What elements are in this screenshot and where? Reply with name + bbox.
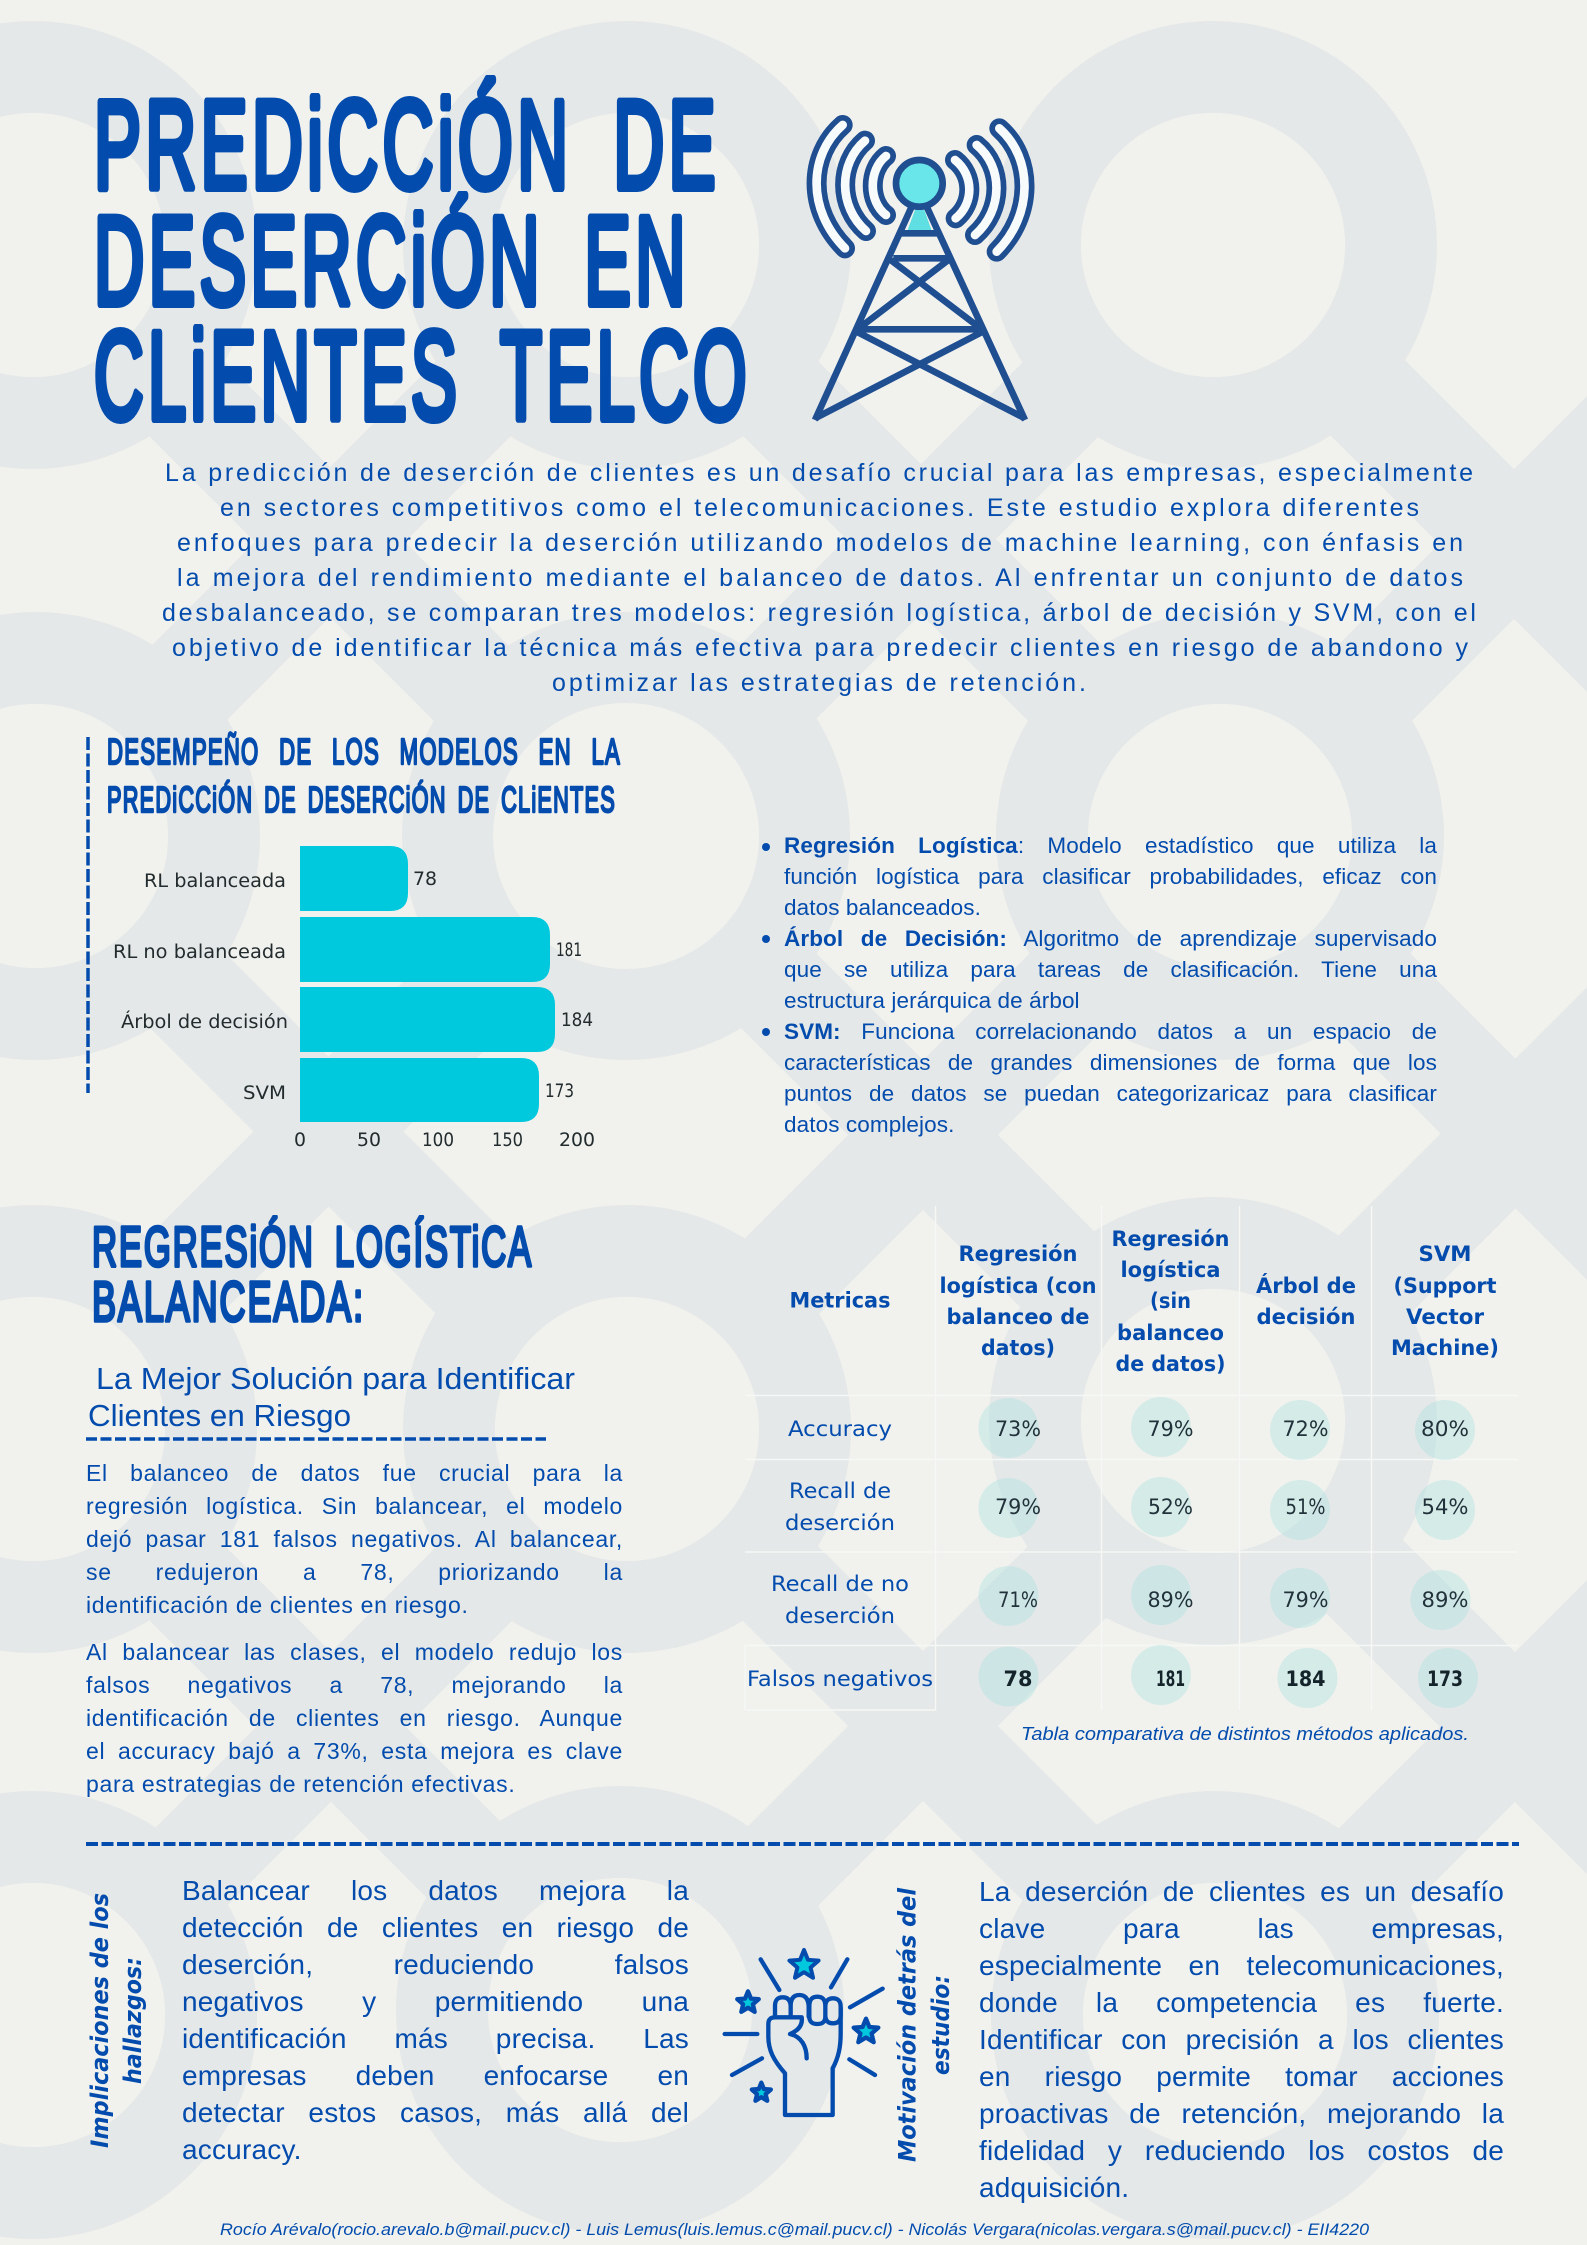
text block: motivación: adquisición.: [979, 2172, 1129, 2203]
table headers: Vector: [1406, 1305, 1485, 1329]
model descriptions list: datos balanceados.: [784, 895, 981, 920]
table values: 78: [1004, 1667, 1032, 1691]
icon: telecom tower: [806, 115, 1034, 422]
table caption: Tabla comparativa de distintos métodos aplicados.: [1021, 1724, 1469, 1744]
bar chart: 200: [559, 1130, 595, 1151]
title: DESERCiÓN EN: [94, 192, 690, 331]
table headers: Machine): [1391, 1336, 1499, 1360]
text block: motivación: en riesgo permite tomar acciones: [979, 2061, 1504, 2092]
table values: 79%: [1148, 1417, 1194, 1441]
model descriptions list: que se utiliza para tareas de clasificación. Tiene una: [784, 957, 1437, 982]
bar chart: 173: [545, 1081, 574, 1102]
table values: 52%: [1148, 1495, 1193, 1519]
table headers: datos): [981, 1336, 1055, 1360]
text block: balanceo de datos: El balanceo de datos fue crucial para la: [86, 1460, 623, 1486]
text block: implicaciones: empresas deben enfocarse en: [182, 2060, 689, 2091]
text block: implicaciones: [182, 1875, 689, 2165]
table values: 173: [1427, 1667, 1463, 1691]
text block: balanceo de datos: identificación de clientes en riesgo.: [86, 1592, 469, 1618]
bar chart: 184: [561, 1010, 593, 1031]
vertical label: implicaciones: hallazgos:: [119, 1957, 147, 2084]
bar chart: 78: [413, 869, 437, 890]
table headers: balanceo de: [946, 1305, 1090, 1329]
bar chart: Árbol de decisión: [121, 1011, 288, 1033]
table headers: (Support: [1394, 1274, 1496, 1298]
text block: motivación: clave para las empresas,: [979, 1913, 1504, 1944]
table values: 184: [1286, 1667, 1326, 1691]
table headers: logística (con: [940, 1274, 1096, 1298]
text block: balanceo de datos: Al balancear las clases, el modelo redujo los: [86, 1639, 623, 1665]
text block: motivación: proactivas de retención, mejorando la: [979, 2098, 1504, 2129]
intro paragraph: enfoques para predecir la deserción utilizando modelos de machine learning, con énfasis en: [177, 529, 1463, 557]
model descriptions list: Regresión Logística: Modelo estadístico que utiliza la: [784, 833, 1437, 858]
text block: implicaciones: detección de clientes en riesgo de: [182, 1912, 689, 1943]
vertical label: motivación: Motivación detrás del: [894, 1887, 922, 2162]
bullet: SVM: [762, 1028, 770, 1036]
text block: implicaciones: accuracy.: [182, 2134, 302, 2165]
table values: 79%: [995, 1495, 1041, 1519]
table values: 51%: [1286, 1495, 1326, 1519]
table row labels: deserción: [785, 1604, 895, 1628]
bar chart: 150: [492, 1130, 523, 1151]
intro paragraph: La predicción de deserción de clientes es un desafío crucial para las empresas, especialmente: [165, 459, 1473, 487]
vertical label: motivación: estudio:: [927, 1975, 955, 2075]
table row labels: Accuracy: [788, 1417, 892, 1441]
title: PREDiCCiÓN DE: [94, 76, 720, 215]
bar chart: 50: [357, 1130, 381, 1151]
table row labels: Recall de no: [771, 1572, 909, 1596]
bar chart: RL no balanceada: [113, 942, 286, 963]
table headers: balanceo: [1117, 1321, 1224, 1345]
table values: 89%: [1148, 1588, 1194, 1612]
model descriptions list: Árbol de Decisión: Algoritmo de aprendizaje supervisado: [784, 926, 1437, 951]
text block: motivación: [979, 1876, 1504, 2203]
model descriptions list: puntos de datos se puedan categorizaricaz para clasificar: [784, 1081, 1437, 1106]
text block: motivación: Identificar con precisión a los clientes: [979, 2024, 1504, 2055]
bar chart: SVM: [243, 1083, 286, 1104]
icon: fist with stars: [722, 1948, 885, 2118]
text block: implicaciones: deserción, reduciendo falsos: [182, 1949, 689, 1980]
vertical label: implicaciones: Implicaciones de los: [86, 1893, 114, 2148]
text block: motivación: La deserción de clientes es un desafío: [979, 1876, 1504, 1907]
intro paragraph: objetivo de identificar la técnica más efectiva para predecir clientes en riesgo de abandono y: [172, 634, 1468, 662]
table headers: Árbol de: [1256, 1273, 1356, 1298]
table headers: SVM: [1418, 1242, 1472, 1266]
intro paragraph: desbalanceado, se comparan tres modelos: regresión logística, árbol de decisión y SVM, con el: [162, 599, 1476, 627]
table headers: (sin: [1150, 1289, 1191, 1313]
bar chart: 181: [556, 940, 582, 961]
text block: balanceo de datos: se redujeron a 78, priorizando la: [86, 1559, 623, 1585]
table values: 79%: [1282, 1588, 1328, 1612]
model descriptions list: características de grandes dimensiones de forma que los: [784, 1050, 1437, 1075]
model descriptions list: SVM: Funciona correlacionando datos a un espacio de: [784, 1019, 1437, 1044]
text block: balanceo de datos: identificación de clientes en riesgo. Aunque: [86, 1705, 623, 1731]
text block: balanceo de datos: [86, 1460, 623, 1797]
bar chart: 100: [422, 1130, 454, 1151]
table headers: de datos): [1116, 1352, 1226, 1376]
text block: balanceo de datos: para estrategias de retención efectivas.: [86, 1771, 515, 1797]
table headers: Regresión: [1112, 1227, 1230, 1251]
bar chart: 0: [294, 1130, 306, 1151]
table row labels: Recall de: [789, 1479, 891, 1503]
table values: 89%: [1422, 1588, 1468, 1612]
text block: implicaciones: identificación más precisa. Las: [182, 2023, 689, 2054]
footer credits: Rocío Arévalo(rocio.arevalo.b@mail.pucv.cl) - Luis Lemus(luis.lemus.c@mail.pucv.cl) - Nicolás Vergara(nicolas.vergara.s@mail.pucv.cl) - EII4220: [220, 2220, 1370, 2239]
model descriptions list: [762, 833, 1437, 1137]
text block: implicaciones: Balancear los datos mejora la: [182, 1875, 689, 1906]
table values: 181: [1156, 1667, 1185, 1691]
text block: balanceo de datos: el accuracy bajó a 73%, esta mejora es clave: [86, 1738, 623, 1764]
table row labels: deserción: [785, 1511, 895, 1535]
chart heading: DESEMPEÑO DE LOS MODELOS EN LA: [107, 731, 621, 772]
section heading: regresión logística balanceada: REGRESiÓN LOGÍSTiCA: [92, 1215, 533, 1279]
table headers: Regresión: [958, 1242, 1078, 1266]
text block: motivación: fidelidad y reduciendo los costos de: [979, 2135, 1504, 2166]
section heading: regresión logística balanceada: BALANCEADA:: [92, 1270, 365, 1334]
table row labels: Falsos negativos: [747, 1667, 933, 1691]
table values: 71%: [998, 1588, 1038, 1612]
text block: balanceo de datos: dejó pasar 181 falsos negativos. Al balancear,: [86, 1526, 623, 1552]
text block: motivación: especialmente en telecomunicaciones,: [979, 1950, 1504, 1981]
model descriptions list: estructura jerárquica de árbol: [784, 988, 1080, 1013]
text block: implicaciones: detectar estos casos, más allá del: [182, 2097, 689, 2128]
table headers: Metricas: [790, 1288, 890, 1312]
table headers: decisión: [1256, 1305, 1356, 1329]
text block: balanceo de datos: regresión logística. Sin balancear, el modelo: [86, 1493, 623, 1519]
intro paragraph: optimizar las estrategias de retención.: [552, 669, 1086, 697]
model descriptions list: datos complejos.: [784, 1112, 954, 1137]
chart heading: PREDiCCiÓN DE DESERCiÓN DE CLiENTES: [107, 779, 616, 820]
title: CLiENTES TELCO: [94, 307, 751, 446]
text block: motivación: donde la competencia es fuerte.: [979, 1987, 1504, 2018]
table headers: logística: [1120, 1258, 1220, 1282]
bullet: árbol de decisión: [762, 935, 770, 943]
subheading: Clientes en Riesgo: [88, 1398, 351, 1433]
model descriptions list: función logística para clasificar probabilidades, eficaz con: [784, 864, 1437, 889]
table values: 80%: [1421, 1417, 1469, 1441]
text block: balanceo de datos: falsos negativos a 78, mejorando la: [86, 1672, 623, 1698]
intro paragraph: en sectores competitivos como el telecomunicaciones. Este estudio explora diferentes: [220, 494, 1419, 522]
intro paragraph: la mejora del rendimiento mediante el balanceo de datos. Al enfrentar un conjunto de datos: [177, 564, 1463, 592]
bullet: regresión logística: [762, 843, 770, 851]
table values: 54%: [1422, 1495, 1468, 1519]
table values: 72%: [1282, 1417, 1328, 1441]
bar chart: RL balanceada: [144, 871, 286, 892]
subheading: La Mejor Solución para Identificar: [96, 1361, 575, 1396]
table values: 73%: [995, 1417, 1041, 1441]
text block: implicaciones: negativos y permitiendo una: [182, 1986, 689, 2017]
